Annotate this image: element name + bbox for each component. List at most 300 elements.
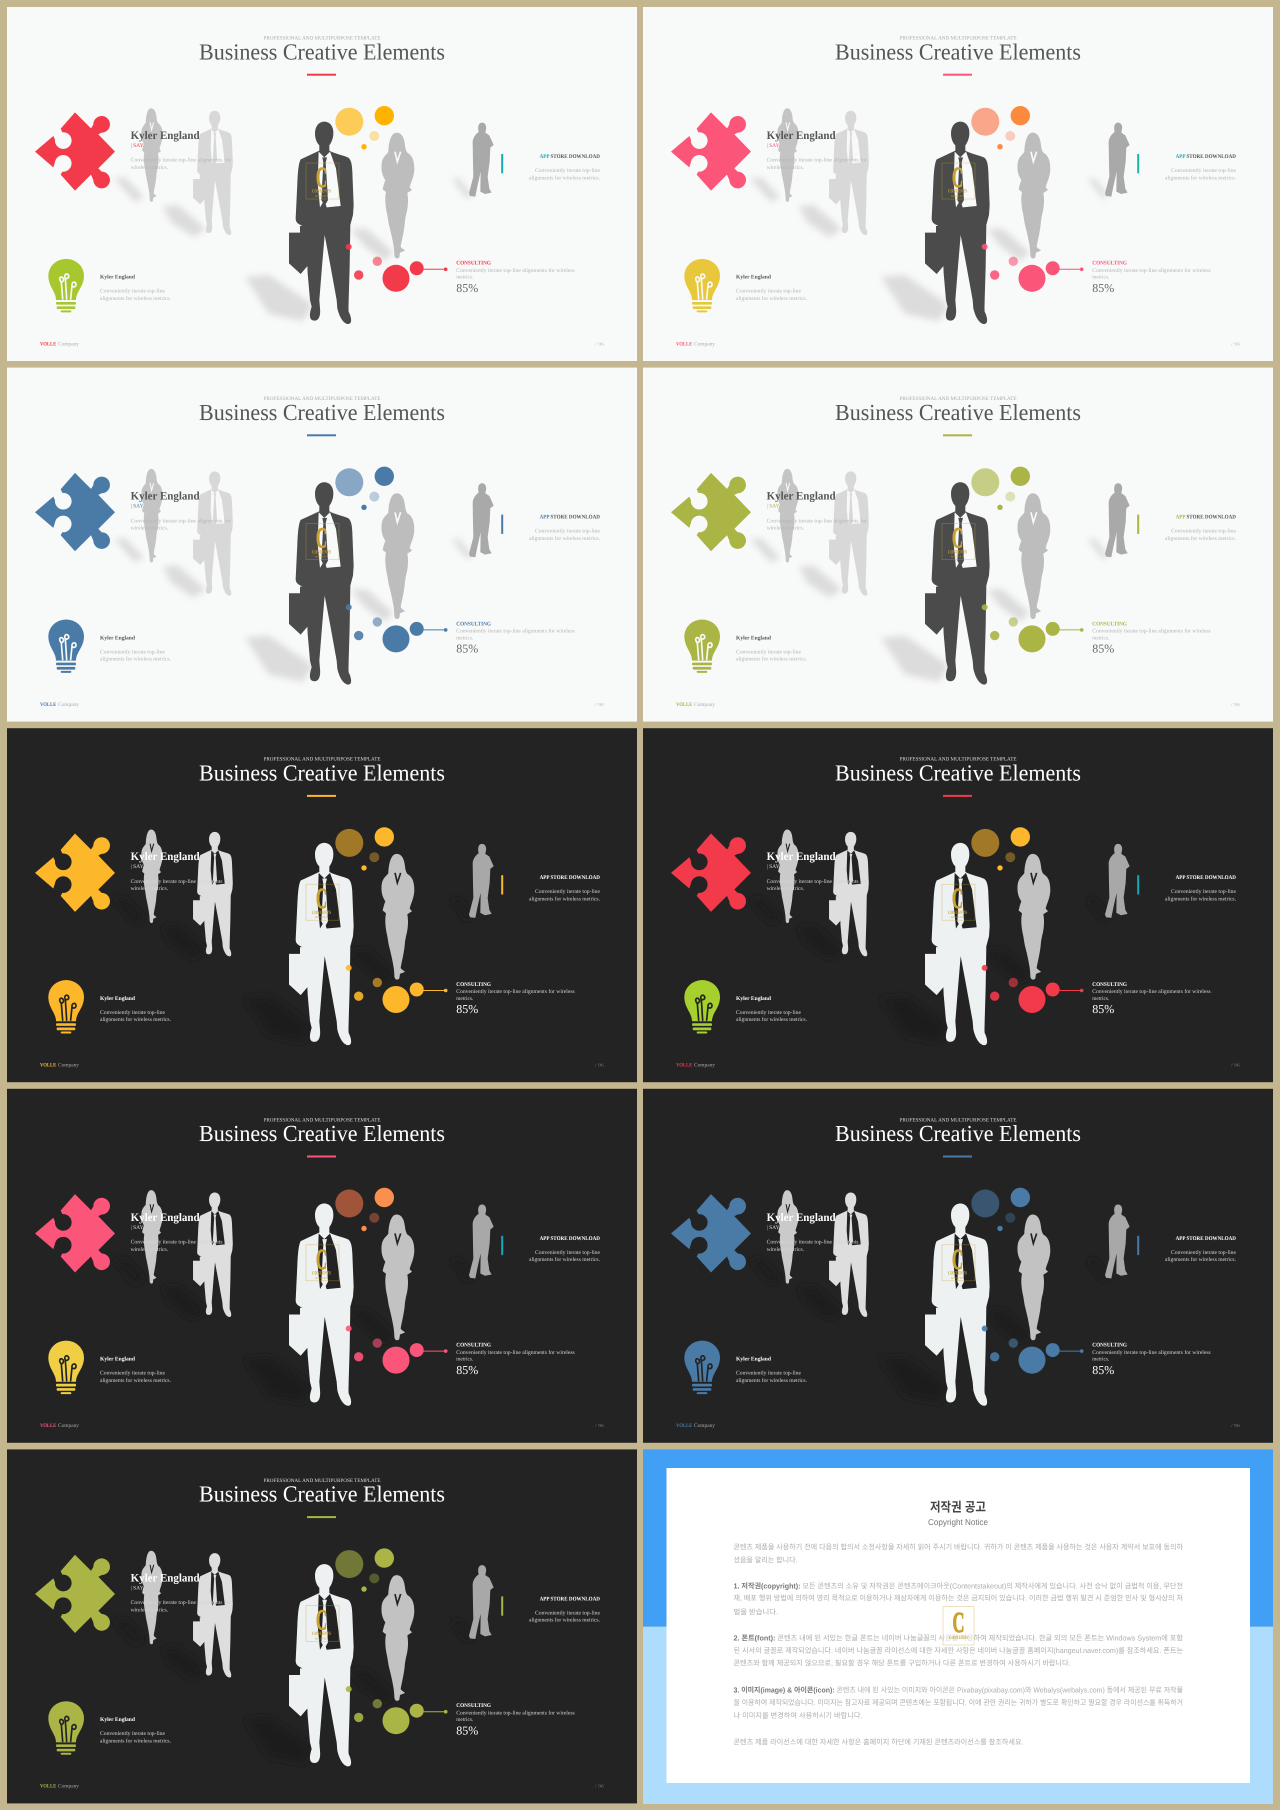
text block: app store download: Conveniently iterate top-line (535, 1250, 601, 1256)
figure: woman centre (381, 1214, 414, 1340)
accent bar (1137, 154, 1139, 173)
figure shadows (114, 899, 472, 1042)
figure shadows (114, 1620, 472, 1763)
footer: / 96 (1231, 341, 1241, 346)
icon: puzzle piece (671, 834, 751, 912)
section 1 copyright (734, 1581, 1183, 1616)
eyebrow: PROFESSIONAL AND MULTIPURPOSE TEMPLATE (264, 36, 380, 42)
footer: Company (58, 1784, 79, 1790)
title: Business Creative Elements (199, 400, 445, 425)
text block: consulting: 85% (1092, 642, 1114, 656)
text block: app store download (529, 1596, 601, 1624)
text block: Kyler England (767, 851, 867, 892)
text block: bulb caption (736, 275, 808, 302)
figure: woman centre (1017, 1214, 1050, 1340)
bottom bubbles and connector (982, 1326, 1084, 1374)
text block: app store download (529, 875, 601, 902)
text block: app store download: APP STORE DOWNLOAD (540, 154, 600, 160)
footer (40, 341, 605, 347)
logo watermark: MAKEOUT (951, 1277, 964, 1280)
figure: woman left (141, 469, 163, 562)
bottom bubbles and connector (982, 604, 1084, 652)
figure: woman left (141, 1551, 163, 1644)
icon: light bulb (684, 619, 720, 673)
accent bar (1137, 515, 1139, 534)
logo watermark: C (952, 883, 963, 915)
text block: bulb caption: Kyler England (100, 635, 136, 641)
section 2 font: 된 시서의 글꼴로 제작되었습니다. 네이버 나눔글꼴 라이선스에 대한 자세한 사항은 네이버 나눔글꼴 홈페이지(hangeul.naver.com)를 참조하세요. 폰트는 (734, 1646, 1183, 1655)
footer: VOLLE (676, 341, 693, 347)
footer (40, 702, 605, 708)
icon: light bulb (48, 619, 84, 673)
text block: app store download: alignments for wireless metrics. (1165, 1257, 1237, 1263)
text block: bulb caption: Kyler England (100, 1357, 136, 1363)
slide 1: light red (7, 7, 637, 361)
figure shadows (750, 899, 1108, 1042)
text block: bulb caption: alignments for wireless metrics. (736, 1017, 808, 1023)
text block: bulb caption: Kyler England (736, 275, 772, 281)
section 1 copyright: 벌을 받습니다. (734, 1607, 778, 1616)
text block: bulb caption: Kyler England (100, 996, 136, 1002)
logo watermark (942, 1244, 975, 1281)
title: Business Creative Elements (199, 1121, 445, 1146)
slide 8: dark blue (643, 1089, 1273, 1443)
text block: Kyler England: Conveniently iterate top-line alignments for (131, 1240, 231, 1246)
text block: app store download (1165, 515, 1237, 542)
text block: Kyler England: wireless metrics. (131, 886, 169, 892)
logo watermark: C (316, 1604, 327, 1636)
text block: consulting (1092, 982, 1211, 1016)
text block: bulb caption: alignments for wireless metrics. (736, 1378, 808, 1384)
closing note: 콘텐츠 제품 라이선스에 대한 자세한 사항은 홈페이지 하단에 기재된 콘텐츠라이선스를 참조하세요. (734, 1737, 1024, 1746)
figure shadows (750, 1260, 1108, 1403)
text block: consulting: Conveniently iterate top-line alignments for wireless (456, 989, 575, 995)
title rule (943, 74, 972, 76)
top bubbles (335, 467, 394, 510)
slide background (7, 728, 637, 1082)
figure: main man with briefcase (289, 1203, 354, 1406)
footer: VOLLE (40, 1062, 57, 1068)
figure: main man with briefcase (925, 482, 990, 685)
figure: woman left (777, 108, 799, 202)
text block: Kyler England: Conveniently iterate top-line alignments for (131, 158, 231, 164)
figure: man left (829, 1193, 869, 1317)
figure: main man with briefcase (289, 1564, 354, 1766)
icon: light bulb (684, 1341, 720, 1394)
title rule (943, 795, 972, 797)
figure: woman centre (1017, 133, 1050, 258)
text block: app store download: Conveniently iterate top-line (1171, 1250, 1237, 1256)
logo watermark: MAKEOUT (951, 916, 964, 919)
logo watermark: C (316, 883, 327, 915)
text block: Kyler England: wireless metrics. (131, 1607, 169, 1613)
text block: Kyler England: Conveniently iterate top-line alignments for (767, 879, 867, 885)
icon: puzzle piece (671, 473, 751, 551)
footer: Company (694, 702, 715, 708)
icon: puzzle piece (35, 112, 115, 191)
text block: consulting: metrics. (456, 275, 474, 281)
text block: consulting: Conveniently iterate top-line alignments for wireless (456, 1710, 575, 1716)
text block: bulb caption: alignments for wireless metrics. (736, 296, 808, 302)
slide 4: light olive (643, 368, 1273, 722)
title rule (307, 795, 336, 797)
text block: bulb caption: Kyler England (100, 275, 136, 281)
text block: Kyler England: | SAY (767, 864, 780, 870)
text block: Kyler England: Conveniently iterate top-line alignments for (767, 518, 867, 524)
title: Business Creative Elements (835, 761, 1081, 786)
footer: VOLLE (40, 1784, 57, 1790)
slide background (7, 368, 637, 722)
text block: app store download: APP STORE DOWNLOAD (540, 875, 600, 881)
text block: consulting: metrics. (1092, 1357, 1110, 1363)
logo watermark (943, 1607, 974, 1645)
text block: consulting: metrics. (1092, 275, 1110, 281)
slide 6: dark red (643, 728, 1273, 1082)
top bubbles (971, 827, 1030, 871)
figure: man left (829, 832, 869, 956)
section 2 font (734, 1633, 1183, 1668)
text block: Kyler England: wireless metrics. (131, 1247, 169, 1253)
logo watermark: C (316, 523, 327, 555)
bottom bubbles and connector (346, 965, 448, 1013)
text block: consulting: metrics. (456, 996, 474, 1002)
logo watermark (942, 523, 975, 560)
text block: Kyler England: wireless metrics. (767, 886, 805, 892)
title rule (943, 434, 972, 436)
text block: bulb caption: alignments for wireless metrics. (100, 657, 172, 663)
text block: consulting: CONSULTING (456, 261, 492, 267)
text block: Kyler England: Kyler England (131, 491, 200, 503)
slide 3: light blue (7, 368, 637, 722)
figure: woman left (777, 469, 799, 562)
footer: Company (694, 1062, 715, 1068)
text block: bulb caption (100, 275, 172, 302)
logo watermark (306, 162, 339, 199)
figure shadows (114, 539, 472, 682)
text block: consulting: metrics. (456, 1717, 474, 1723)
footer: VOLLE (676, 1062, 693, 1068)
top bubbles (335, 1188, 394, 1231)
slide 2: light pink (643, 7, 1273, 361)
section 2 font: 콘텐츠와 함께 제공되지 않으므로, 필요할 경우 해당 폰트를 구입하거나 다른 폰트로 변경하여 사용하시기 바랍니다. (734, 1659, 1070, 1668)
icon: light bulb (684, 980, 720, 1034)
text block: app store download: APP STORE DOWNLOAD (1176, 154, 1236, 160)
footer: Company (694, 1423, 715, 1429)
text block: consulting: CONSULTING (456, 621, 492, 627)
footer: Company (58, 1062, 79, 1068)
logo watermark: CONTENTS (312, 549, 331, 555)
text block: app store download (529, 154, 601, 181)
slide background (7, 1089, 637, 1443)
slide background (643, 1089, 1273, 1443)
text block: bulb caption: alignments for wireless metrics. (100, 1017, 172, 1023)
title: Business Creative Elements (199, 761, 445, 786)
text block: bulb caption: Conveniently iterate top-line (100, 1371, 166, 1377)
footer (676, 1423, 1241, 1429)
logo watermark: MAKEOUT (315, 195, 328, 198)
text block: app store download: alignments for wireless metrics. (529, 175, 601, 181)
top bubbles (971, 467, 1030, 510)
text block: app store download: alignments for wireless metrics. (1165, 175, 1237, 181)
footer: VOLLE (676, 702, 693, 708)
eyebrow: PROFESSIONAL AND MULTIPURPOSE TEMPLATE (264, 396, 380, 402)
figure: man right (1105, 1204, 1130, 1278)
text block: Kyler England: Kyler England (767, 491, 836, 503)
title rule (307, 434, 336, 436)
footer: / 96 (595, 1423, 605, 1428)
eyebrow: PROFESSIONAL AND MULTIPURPOSE TEMPLATE (264, 1478, 380, 1484)
text block: consulting: 85% (1092, 1002, 1114, 1016)
title rule (943, 1156, 972, 1158)
text block: app store download: Conveniently iterate top-line (535, 1610, 601, 1616)
text block: Kyler England: Kyler England (131, 1572, 200, 1584)
icon: puzzle piece (35, 834, 115, 912)
bottom bubbles and connector (346, 1686, 448, 1734)
text block: consulting (1092, 621, 1211, 656)
footer: VOLLE (40, 341, 57, 347)
text block: consulting: 85% (456, 1723, 478, 1737)
logo watermark: C (952, 162, 963, 194)
logo watermark: CONTENTS (948, 189, 967, 195)
figure: man left (193, 832, 233, 956)
text block: Kyler England: | SAY (767, 504, 780, 510)
text block: consulting: Conveniently iterate top-line alignments for wireless (1092, 629, 1211, 635)
footer (676, 341, 1241, 347)
text block: Kyler England: | SAY (131, 1585, 144, 1591)
text block: consulting: CONSULTING (1092, 1343, 1128, 1349)
text block: consulting (456, 261, 575, 295)
footer (676, 1062, 1241, 1068)
footer: / 96 (1231, 1062, 1241, 1068)
text block: app store download (1165, 875, 1237, 902)
logo watermark: CONTENTS (949, 1635, 968, 1641)
text block: consulting: Conveniently iterate top-line alignments for wireless (1092, 268, 1211, 274)
text block: Kyler England: Conveniently iterate top-line alignments for (131, 1600, 231, 1606)
text block: Kyler England: | SAY (767, 143, 780, 149)
logo watermark (942, 162, 975, 199)
top bubbles (971, 1188, 1030, 1231)
text block: consulting: Conveniently iterate top-line alignments for wireless (1092, 1350, 1211, 1356)
icon: light bulb (48, 1341, 84, 1394)
text block: bulb caption: Conveniently iterate top-line (736, 1371, 802, 1377)
figure: man left (193, 1193, 233, 1317)
slide background (643, 368, 1273, 722)
logo watermark (306, 1604, 339, 1641)
text block: app store download (529, 515, 601, 542)
text block: app store download: APP STORE DOWNLOAD (1176, 875, 1236, 881)
logo watermark: C (952, 1607, 964, 1639)
bottom bubbles and connector (982, 965, 1084, 1013)
title rule (307, 74, 336, 76)
eyebrow: PROFESSIONAL AND MULTIPURPOSE TEMPLATE (900, 396, 1016, 402)
logo watermark: CONTENTS (312, 910, 331, 916)
text block: Kyler England (131, 491, 231, 532)
text block: Kyler England: Kyler England (767, 130, 836, 142)
accent bar (501, 154, 503, 173)
icon: light bulb (684, 259, 720, 312)
text block: Kyler England (131, 851, 231, 892)
intro paragraph (734, 1542, 1183, 1564)
text block: bulb caption (736, 1356, 808, 1384)
title rule (307, 1516, 336, 1518)
eyebrow: PROFESSIONAL AND MULTIPURPOSE TEMPLATE (264, 1117, 380, 1123)
text block: app store download: Conveniently iterate top-line (1171, 168, 1237, 174)
figure shadows (750, 178, 1108, 321)
top bubbles (335, 827, 394, 871)
logo watermark: CONTENTS (312, 1631, 331, 1637)
eyebrow: PROFESSIONAL AND MULTIPURPOSE TEMPLATE (900, 757, 1016, 763)
accent bar (501, 1596, 503, 1616)
text block: consulting (456, 1342, 575, 1377)
text block: app store download: alignments for wireless metrics. (529, 536, 601, 542)
eyebrow: PROFESSIONAL AND MULTIPURPOSE TEMPLATE (900, 1117, 1016, 1123)
text block: app store download: Conveniently iterate top-line (1171, 889, 1237, 895)
text block: consulting: 85% (1092, 281, 1114, 295)
text block: consulting: metrics. (1092, 635, 1110, 641)
text block: Kyler England (131, 1212, 231, 1253)
text block: consulting: Conveniently iterate top-line alignments for wireless (1092, 989, 1211, 995)
text block: consulting: CONSULTING (1092, 261, 1128, 267)
top bubbles (971, 106, 1030, 149)
figure: woman left (141, 108, 163, 202)
text block: app store download: alignments for wireless metrics. (529, 1618, 601, 1624)
text block: app store download: APP STORE DOWNLOAD (540, 1596, 600, 1602)
text block: app store download: Conveniently iterate top-line (535, 529, 601, 535)
text block: app store download: Conveniently iterate top-line (535, 889, 601, 895)
footer: VOLLE (40, 702, 57, 708)
logo watermark: CONTENTS (948, 549, 967, 555)
eyebrow: PROFESSIONAL AND MULTIPURPOSE TEMPLATE (264, 757, 380, 763)
text block: Kyler England (131, 130, 231, 171)
text block: app store download (1165, 154, 1237, 181)
section 3 image and icon (734, 1685, 1183, 1720)
text block: consulting: 85% (456, 1363, 478, 1377)
figure: woman centre (1017, 493, 1050, 619)
title rule (307, 1156, 336, 1158)
eyebrow: PROFESSIONAL AND MULTIPURPOSE TEMPLATE (900, 36, 1016, 42)
accent bar (1137, 1236, 1139, 1255)
text block: bulb caption: Conveniently iterate top-line (736, 1010, 802, 1016)
logo watermark (306, 883, 339, 920)
text block: Kyler England: wireless metrics. (767, 165, 805, 171)
figure: man right (469, 1204, 494, 1278)
text block: bulb caption: Kyler England (736, 1357, 772, 1363)
slide background (643, 7, 1273, 361)
text block: consulting: CONSULTING (1092, 621, 1128, 627)
logo watermark: C (316, 1244, 327, 1276)
text block: bulb caption: alignments for wireless metrics. (736, 657, 808, 663)
text block: consulting: Conveniently iterate top-line alignments for wireless (456, 1350, 575, 1356)
text block: consulting (1092, 261, 1211, 295)
figure: main man with briefcase (289, 482, 354, 685)
accent bar (501, 515, 503, 534)
icon: puzzle piece (35, 1555, 115, 1633)
logo watermark: MAKEOUT (315, 1277, 328, 1280)
text block: app store download: alignments for wireless metrics. (529, 1257, 601, 1263)
title: Business Creative Elements (199, 1482, 445, 1507)
figure shadows (114, 178, 472, 321)
text block: Kyler England: wireless metrics. (131, 165, 169, 171)
slide background (7, 7, 637, 361)
footer (676, 702, 1241, 708)
text block: Kyler England: Conveniently iterate top-line alignments for (767, 158, 867, 164)
intro paragraph: 셨음을 알리는 합니다. (734, 1555, 798, 1564)
figure: woman left (141, 830, 163, 923)
text block: Kyler England: wireless metrics. (131, 526, 169, 532)
footer: / 96 (595, 1062, 605, 1068)
text block: consulting: Conveniently iterate top-line alignments for wireless (456, 268, 575, 274)
text block: consulting: 85% (1092, 1363, 1114, 1377)
footer: VOLLE (676, 1423, 693, 1429)
text block: consulting: Conveniently iterate top-line alignments for wireless (456, 629, 575, 635)
text block: bulb caption: Kyler England (736, 996, 772, 1002)
text block: Kyler England: Kyler England (131, 851, 200, 863)
section 3 image and icon: 3. 이미지(image) & 아이콘(icon): 콘텐츠 내에 된 사있는 이미지와 아이콘은 Pixabay(pixabay.com)와 Webalys(webalys.com) 등에서 제공된 무료 저작물 (734, 1685, 1183, 1694)
text block: Kyler England (767, 130, 867, 171)
footer (40, 1784, 605, 1790)
figure: main man with briefcase (925, 122, 990, 324)
slide background (643, 728, 1273, 1082)
text block: app store download: Conveniently iterate top-line (535, 168, 601, 174)
figure: woman centre (381, 1575, 414, 1701)
text block: Kyler England (767, 491, 867, 532)
icon: light bulb (48, 980, 84, 1034)
text block: bulb caption: Conveniently iterate top-line (100, 1010, 166, 1016)
bottom bubbles and connector (346, 1326, 448, 1374)
text block: app store download: Conveniently iterate top-line (1171, 529, 1237, 535)
text block: Kyler England: | SAY (131, 864, 144, 870)
text block: app store download: alignments for wireless metrics. (1165, 897, 1237, 903)
text block: app store download: alignments for wireless metrics. (1165, 536, 1237, 542)
logo watermark (306, 1244, 339, 1281)
figure: woman left (777, 830, 799, 923)
title: Business Creative Elements (835, 39, 1081, 64)
icon: light bulb (48, 1701, 84, 1755)
figure: man right (1105, 123, 1130, 197)
text block: Kyler England (131, 1572, 231, 1613)
footer: Company (58, 1423, 79, 1429)
figure: main man with briefcase (289, 843, 354, 1045)
footer: Company (58, 341, 79, 347)
figure: man right (469, 1565, 494, 1639)
text block: app store download: APP STORE DOWNLOAD (1176, 1236, 1236, 1242)
figure shadows (114, 1260, 472, 1403)
text block: bulb caption (100, 996, 172, 1023)
logo watermark: CONTENTS (312, 189, 331, 195)
logo watermark: C (952, 523, 963, 555)
title: Business Creative Elements (835, 400, 1081, 425)
figure: man right (1105, 483, 1130, 557)
footer: Company (694, 341, 715, 347)
slide 9: dark olive (7, 1449, 637, 1803)
footer (40, 1062, 605, 1068)
copyright subheading: Copyright Notice (928, 1517, 988, 1527)
text block: consulting (1092, 1342, 1211, 1377)
light blue lower background (643, 1627, 1273, 1804)
figure: man right (1105, 844, 1130, 918)
text block: bulb caption: alignments for wireless metrics. (100, 296, 172, 302)
text block: app store download: alignments for wireless metrics. (529, 897, 601, 903)
text block: bulb caption (100, 1356, 172, 1384)
logo watermark: MAKEOUT (951, 195, 964, 198)
logo watermark (942, 883, 975, 920)
figure: man right (469, 123, 494, 197)
text block: Kyler England: | SAY (131, 504, 144, 510)
text block: bulb caption: Kyler England (736, 635, 772, 641)
text block: Kyler England: Conveniently iterate top-line alignments for (767, 1240, 867, 1246)
bottom bubbles and connector (346, 604, 448, 652)
text block: app store download: APP STORE DOWNLOAD (540, 515, 600, 521)
